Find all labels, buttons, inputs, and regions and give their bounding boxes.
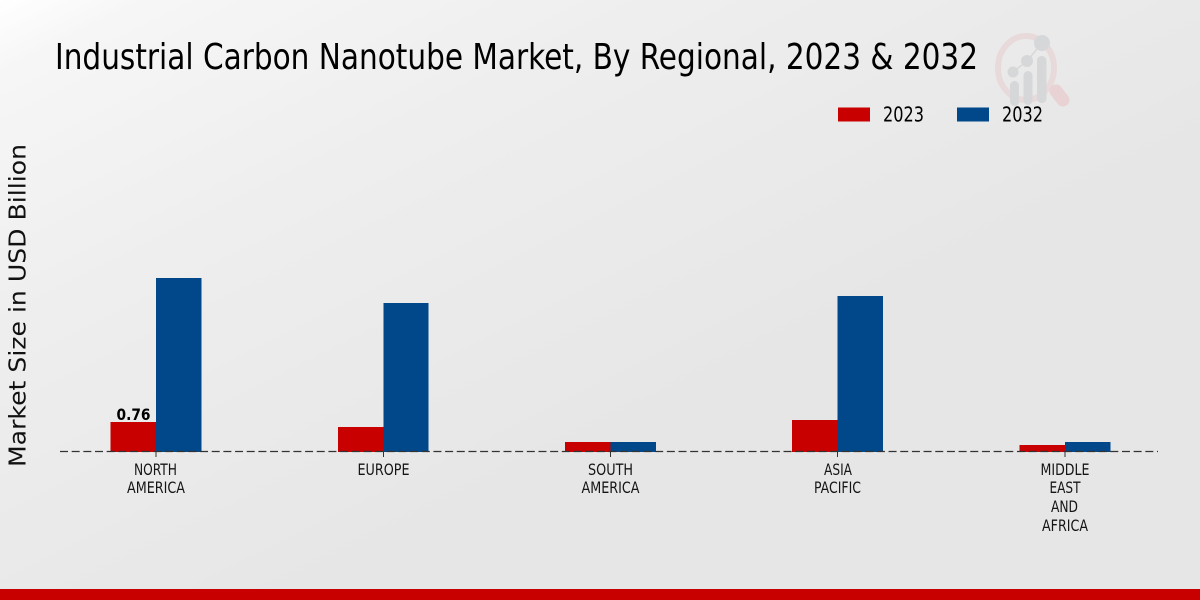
category label: Europe: EUROPE — [358, 460, 410, 479]
icon: magnifier logo watermark — [998, 35, 1063, 106]
category label: North America — [127, 460, 185, 497]
category label: Middle East and Africa: EAST — [1050, 478, 1081, 497]
legend swatch 2023 — [838, 108, 870, 122]
legend label 2023: 2023 — [883, 102, 924, 126]
category label: Middle East and Africa: MIDDLE — [1040, 460, 1090, 479]
title: Industrial Carbon Nanotube Market, By Regional, 2023 & 2032 — [55, 37, 978, 78]
category label: Asia Pacific — [814, 460, 861, 497]
bars: South America — [565, 442, 656, 452]
x axis baseline — [60, 450, 1158, 452]
legend swatch 2032 — [957, 108, 989, 122]
category label: South America: SOUTH — [588, 460, 633, 479]
legend label 2032: 2032 — [1002, 102, 1043, 126]
bars: Europe — [338, 303, 428, 452]
category label: North America: AMERICA — [127, 478, 185, 497]
category label: North America: NORTH — [134, 460, 177, 479]
bars: North America — [110, 278, 202, 452]
category label: Middle East and Africa — [1040, 460, 1090, 535]
bar chart — [60, 278, 1158, 457]
legend — [838, 102, 1043, 126]
x axis ticks — [156, 452, 1065, 457]
category label: Asia Pacific: PACIFIC — [814, 478, 861, 497]
category label: South America — [582, 460, 640, 497]
category label: Asia Pacific: ASIA — [824, 460, 852, 479]
y axis title: Market Size in USD Billion — [6, 144, 32, 467]
bottom red band — [0, 589, 1200, 600]
category label: Middle East and Africa: AND — [1051, 497, 1078, 516]
bars: Middle East and Africa — [1020, 442, 1110, 452]
category label: Middle East and Africa: AFRICA — [1042, 516, 1088, 535]
value label 0.76: 0.76 — [116, 405, 150, 424]
bars: Asia Pacific — [792, 296, 883, 452]
category label: South America: AMERICA — [582, 478, 640, 497]
